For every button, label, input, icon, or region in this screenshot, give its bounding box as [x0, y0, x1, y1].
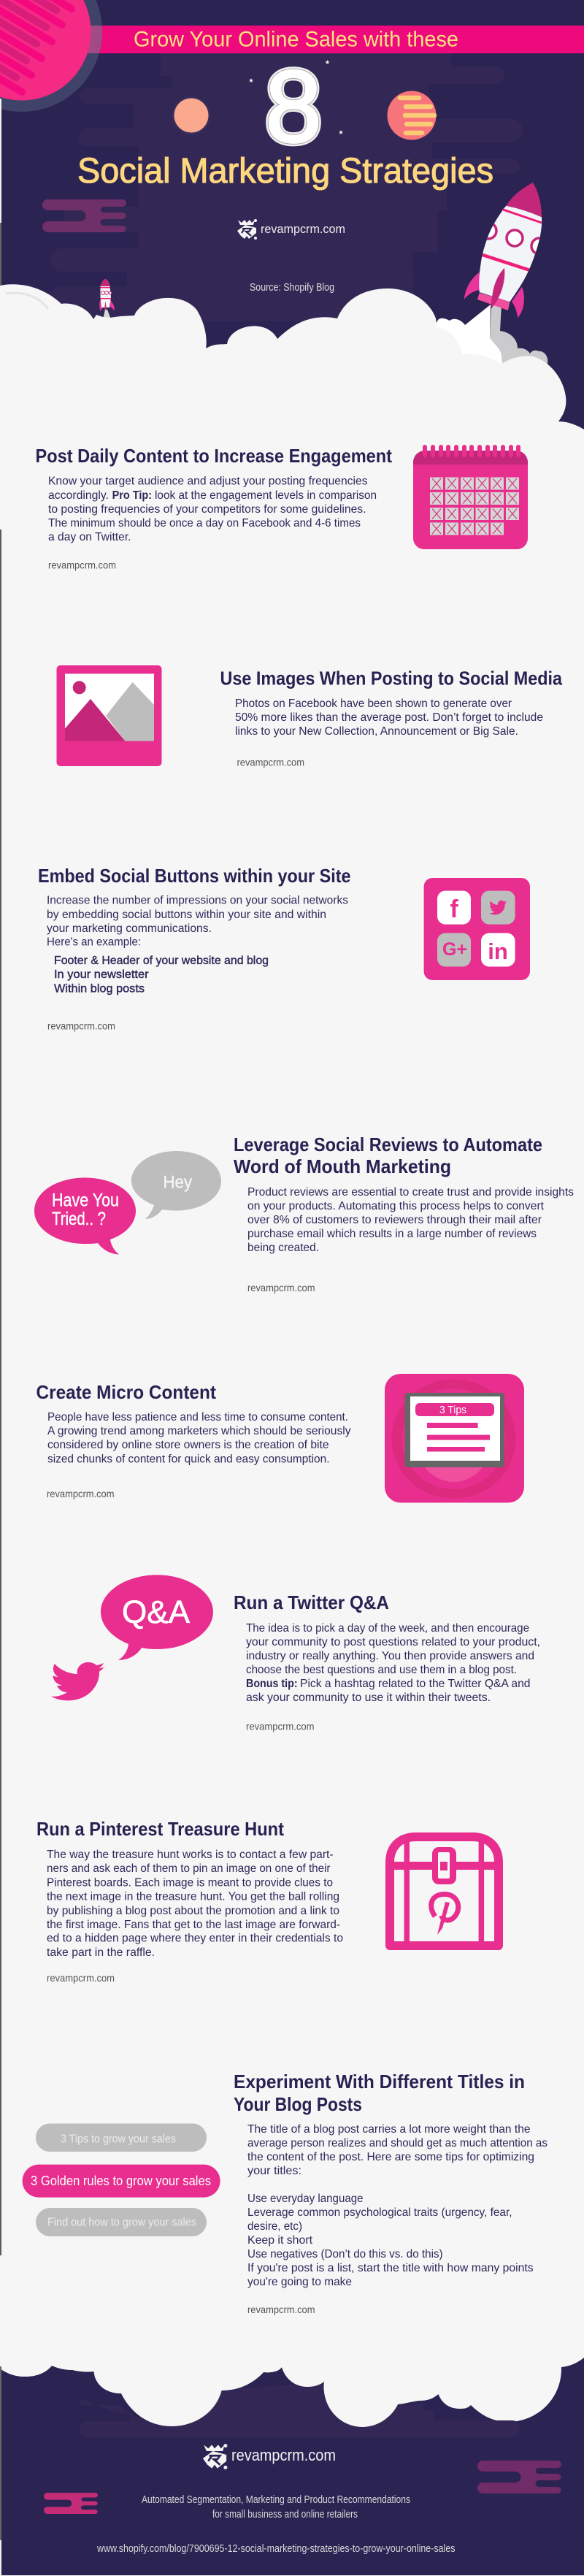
footer tagline: [142, 2494, 410, 2520]
text block: experiment with titles: Use everyday language: [247, 2193, 364, 2205]
banner: Grow Your Online Sales: Grow Your Online Sales with these: [134, 28, 458, 51]
logo: revampcrm.com: revampcrm.com: [261, 222, 345, 236]
text block: embed social buttons: by embedding social buttons within your site and within: [47, 909, 326, 921]
text block: use images: 50% more likes than the average post. Don’t forget to include: [235, 711, 543, 724]
text block: run a twitter Q&A: Pick a hashtag related to the Twitter Q&A and: [300, 1678, 530, 1690]
text block: embed social buttons: your marketing communications.: [47, 922, 212, 935]
section 6: run a twitter Q&A: [51, 1575, 540, 1732]
cloud shading arc: [6, 293, 48, 309]
list: button placements: In your newsletter: [54, 968, 149, 981]
decorative cloud icon: upper left: [42, 199, 126, 232]
footer tagline: for small business and online retailers: [212, 2509, 358, 2520]
text block: run a twitter Q&A: ask your community to use it within their tweets.: [246, 1692, 491, 1704]
text block: post daily content: look at the engagement levels in comparison: [155, 489, 377, 502]
panel: hero header background: [0, 0, 584, 438]
heading: post daily content: Post Daily Content to Increase Engagement: [35, 445, 392, 467]
list: button placements: [54, 955, 269, 995]
text block: post daily content: to posting frequencies of your competitors for some guidelines.: [48, 503, 366, 516]
icon: large rocket: [464, 183, 548, 318]
text block: run a twitter Q&A: your community to post questions related to your product,: [246, 1636, 540, 1648]
text block: create micro content: considered by online store owners is the creation of bite: [47, 1439, 329, 1451]
text block: post daily content: accordingly.: [48, 489, 109, 502]
logo: footer revampcrm.com: [203, 2444, 336, 2469]
icon: tablet with tips: [385, 1374, 524, 1503]
text block: leverage social reviews: Product reviews are essential to create trust and provide insights: [247, 1186, 574, 1199]
site credit: revampcrm.com: [47, 1972, 115, 1984]
text block: pinterest treasure hunt: the next image in the treasure hunt. You get the ball rolling: [47, 1890, 339, 1903]
site credit: revampcrm.com: [47, 1020, 115, 1031]
text block: run a twitter Q&A: Bonus tip:: [246, 1678, 298, 1690]
icon: gray title pill one: [36, 2124, 207, 2152]
title: Social Marketing Strategies: Social Marketing Strategies: [77, 152, 493, 191]
big number 8: 8: [265, 49, 322, 164]
site credit: revampcrm.com: [246, 1721, 314, 1732]
section 5: create micro content: [36, 1374, 524, 1503]
icon: small rocket: [99, 279, 115, 319]
text block: pinterest treasure hunt: [47, 1849, 343, 1959]
text block: experiment with titles: desire, etc): [247, 2220, 302, 2233]
icon: pink planet: [0, 0, 110, 112]
text block: pinterest treasure hunt: take part in the raffle.: [47, 1946, 155, 1959]
text block: use images: links to your New Collection, Announcement or Big Sale.: [235, 725, 518, 738]
text block: post daily content: The minimum should be once a day on Facebook and 4-6 times: [48, 517, 361, 530]
icon: social buttons: in: [488, 939, 508, 964]
text block: experiment with titles: your titles:: [247, 2165, 301, 2177]
text block: run a twitter Q&A: industry or really anything. You then provide answers and: [246, 1650, 534, 1662]
panel: footer background: [0, 2358, 584, 2575]
heading: pinterest treasure hunt: Run a Pinterest Treasure Hunt: [36, 1818, 284, 1840]
site credit: revampcrm.com: [47, 1488, 114, 1499]
text block: use images: [235, 697, 543, 738]
heading: experiment with titles: Experiment With Different Titles in: [234, 2071, 525, 2092]
list: button placements: Footer & Header of your website and blog: [54, 955, 269, 967]
section 1: post daily content: [35, 445, 528, 571]
banner: Grow Your Online Sales: [0, 26, 584, 53]
text block: leverage social reviews: purchase email which results in a large number of reviews: [247, 1228, 537, 1240]
text block: pinterest treasure hunt: by publishing a blog post about the promotion and a link to: [47, 1905, 339, 1917]
text block: post daily content: a day on Twitter.: [48, 531, 131, 543]
text block: post daily content: [48, 475, 377, 543]
icon: smoke behind large rocket: [435, 305, 548, 365]
section 7: pinterest treasure hunt: [36, 1818, 500, 1984]
text block: pinterest treasure hunt: Pinterest boards. Each image is meant to provide clues to: [47, 1877, 333, 1889]
decorative cloud icon: footer left: [44, 2493, 98, 2514]
icon: twitter bird: [51, 1662, 105, 1700]
site credit: revampcrm.com: [237, 757, 304, 768]
text block: post daily content: Pro Tip:: [112, 489, 152, 502]
logo: revampcrm.com: [237, 219, 345, 240]
icon: social buttons: [424, 878, 530, 980]
logo: footer revampcrm.com: revampcrm.com: [231, 2446, 336, 2464]
list: button placements: Within blog posts: [54, 983, 145, 995]
icon: social buttons: G+: [442, 939, 467, 960]
text block: pinterest treasure hunt: ners and ask each of them to pin an image on one of their: [47, 1862, 331, 1875]
text block: post daily content: Know your target audience and adjust your posting frequencies: [48, 475, 368, 488]
icon: tablet with tips: 3 Tips: [439, 1404, 466, 1416]
site credit: revampcrm.com: [247, 1282, 315, 1293]
icon: speech bubbles: Have You: [52, 1190, 119, 1211]
heading: embed social buttons: Embed Social Buttons within your Site: [38, 865, 350, 887]
text block: use images: Photos on Facebook have been shown to generate over: [235, 697, 512, 710]
site credit: revampcrm.com: [48, 559, 116, 571]
text block: leverage social reviews: being created.: [247, 1242, 319, 1254]
icon: peach planet: [172, 96, 210, 134]
text block: embed social buttons: [47, 894, 348, 948]
icon: Q&A bubble: [101, 1575, 213, 1660]
section 4: leverage social reviews: [34, 1134, 574, 1293]
text block: create micro content: [47, 1411, 350, 1465]
text block: leverage social reviews: over 8% of customers to reviewers through their mail after: [247, 1214, 542, 1226]
heading: experiment with titles: Your Blog Posts: [234, 2093, 362, 2115]
big number 8: 8: [265, 49, 322, 164]
icon: pink title pill: 3 Golden rules to grow your sales: [31, 2173, 211, 2188]
heading: create micro content: Create Micro Content: [36, 1381, 216, 1403]
icon: striped orange planet: [387, 91, 437, 140]
icon: gray title pill two: [36, 2208, 207, 2236]
text block: leverage social reviews: [247, 1186, 574, 1254]
text block: create micro content: A growing trend among marketers which should be seriously: [47, 1425, 350, 1437]
text block: run a twitter Q&A: [246, 1622, 540, 1704]
text block: embed social buttons: Increase the number of impressions on your social networks: [47, 894, 348, 907]
heading: experiment with titles: [234, 2071, 525, 2115]
text block: experiment with titles: Use negatives (Don’t do this vs. do this): [247, 2248, 443, 2260]
icon: picture: [57, 665, 162, 766]
text block: embed social buttons: Here's an example:: [47, 936, 141, 948]
text block: experiment with titles: Leverage common psychological traits (urgency, fear,: [247, 2206, 512, 2219]
icon: speech bubbles: Tried.. ?: [52, 1209, 106, 1229]
text block: experiment with titles: The title of a blog post carries a lot more weight than the: [247, 2123, 531, 2136]
text block: experiment with titles: If you're post is a list, start the title with how many points: [247, 2262, 534, 2274]
footer source url: www.shopify.com/blog/7900695-12-social-marketing-strategies-to-grow-your-online-sales: [96, 2543, 456, 2555]
heading: leverage social reviews: [234, 1134, 542, 1177]
text block: experiment with titles: the content of the post. Here are some tips for optimizing: [247, 2151, 534, 2163]
text block: experiment with titles: Keep it short: [247, 2234, 313, 2247]
icon: speech bubbles: Hey: [164, 1173, 192, 1192]
icon: gray title pill two: Find out how to grow your sales: [47, 2216, 196, 2229]
section 2: use images: [57, 665, 562, 768]
icon: calendar: [413, 447, 528, 549]
text block: experiment with titles: you're going to make: [247, 2276, 352, 2288]
text block: experiment with titles: average person realizes and should get as much attention as: [247, 2137, 548, 2149]
text block: create micro content: People have less patience and less time to consume content.: [47, 1411, 348, 1423]
text block: leverage social reviews: on your products. Automating this process helps to convert: [247, 1200, 545, 1212]
footer tagline: Automated Segmentation, Marketing and Product Recommendations: [142, 2494, 410, 2506]
icon: speech bubbles: [34, 1151, 221, 1255]
icon: stars: [249, 60, 343, 134]
icon: Q&A bubble: Q&A: [122, 1594, 191, 1630]
text block: create micro content: sized chunks of content for quick and easy consumption.: [47, 1453, 330, 1465]
text block: run a twitter Q&A: The idea is to pick a day of the week, and then encourage: [246, 1622, 529, 1635]
icon: pink title pill: [23, 2165, 220, 2198]
heading: leverage social reviews: Leverage Social Reviews to Automate: [234, 1134, 542, 1155]
text block: pinterest treasure hunt: the first image. Fans that get to the last image are forward-: [47, 1919, 340, 1931]
text block: pinterest treasure hunt: The way the treasure hunt works is to contact a few part-: [47, 1849, 334, 1861]
icon: gray title pill one: 3 Tips to grow your sales: [61, 2133, 176, 2146]
big number 8: 8: [265, 49, 322, 164]
section 8: experiment with titles: [23, 2071, 548, 2315]
icon: social buttons: f: [450, 895, 458, 923]
decorative cloud icon: footer right: [477, 2461, 561, 2493]
section 3: embed social buttons: [38, 865, 530, 1031]
text block: experiment with titles: [247, 2123, 548, 2288]
text block: run a twitter Q&A: choose the best questions and use them in a blog post.: [246, 1664, 517, 1676]
site credit: revampcrm.com: [247, 2304, 315, 2315]
source line: Source: Shopify Blog: [250, 282, 334, 294]
text block: pinterest treasure hunt: ed to a hidden page where they enter in their credentials to: [47, 1933, 343, 1944]
heading: run a twitter Q&A: Run a Twitter Q&A: [234, 1591, 389, 1613]
icon: pinterest treasure chest: [387, 1835, 500, 1946]
heading: leverage social reviews: Word of Mouth Marketing: [234, 1155, 451, 1177]
